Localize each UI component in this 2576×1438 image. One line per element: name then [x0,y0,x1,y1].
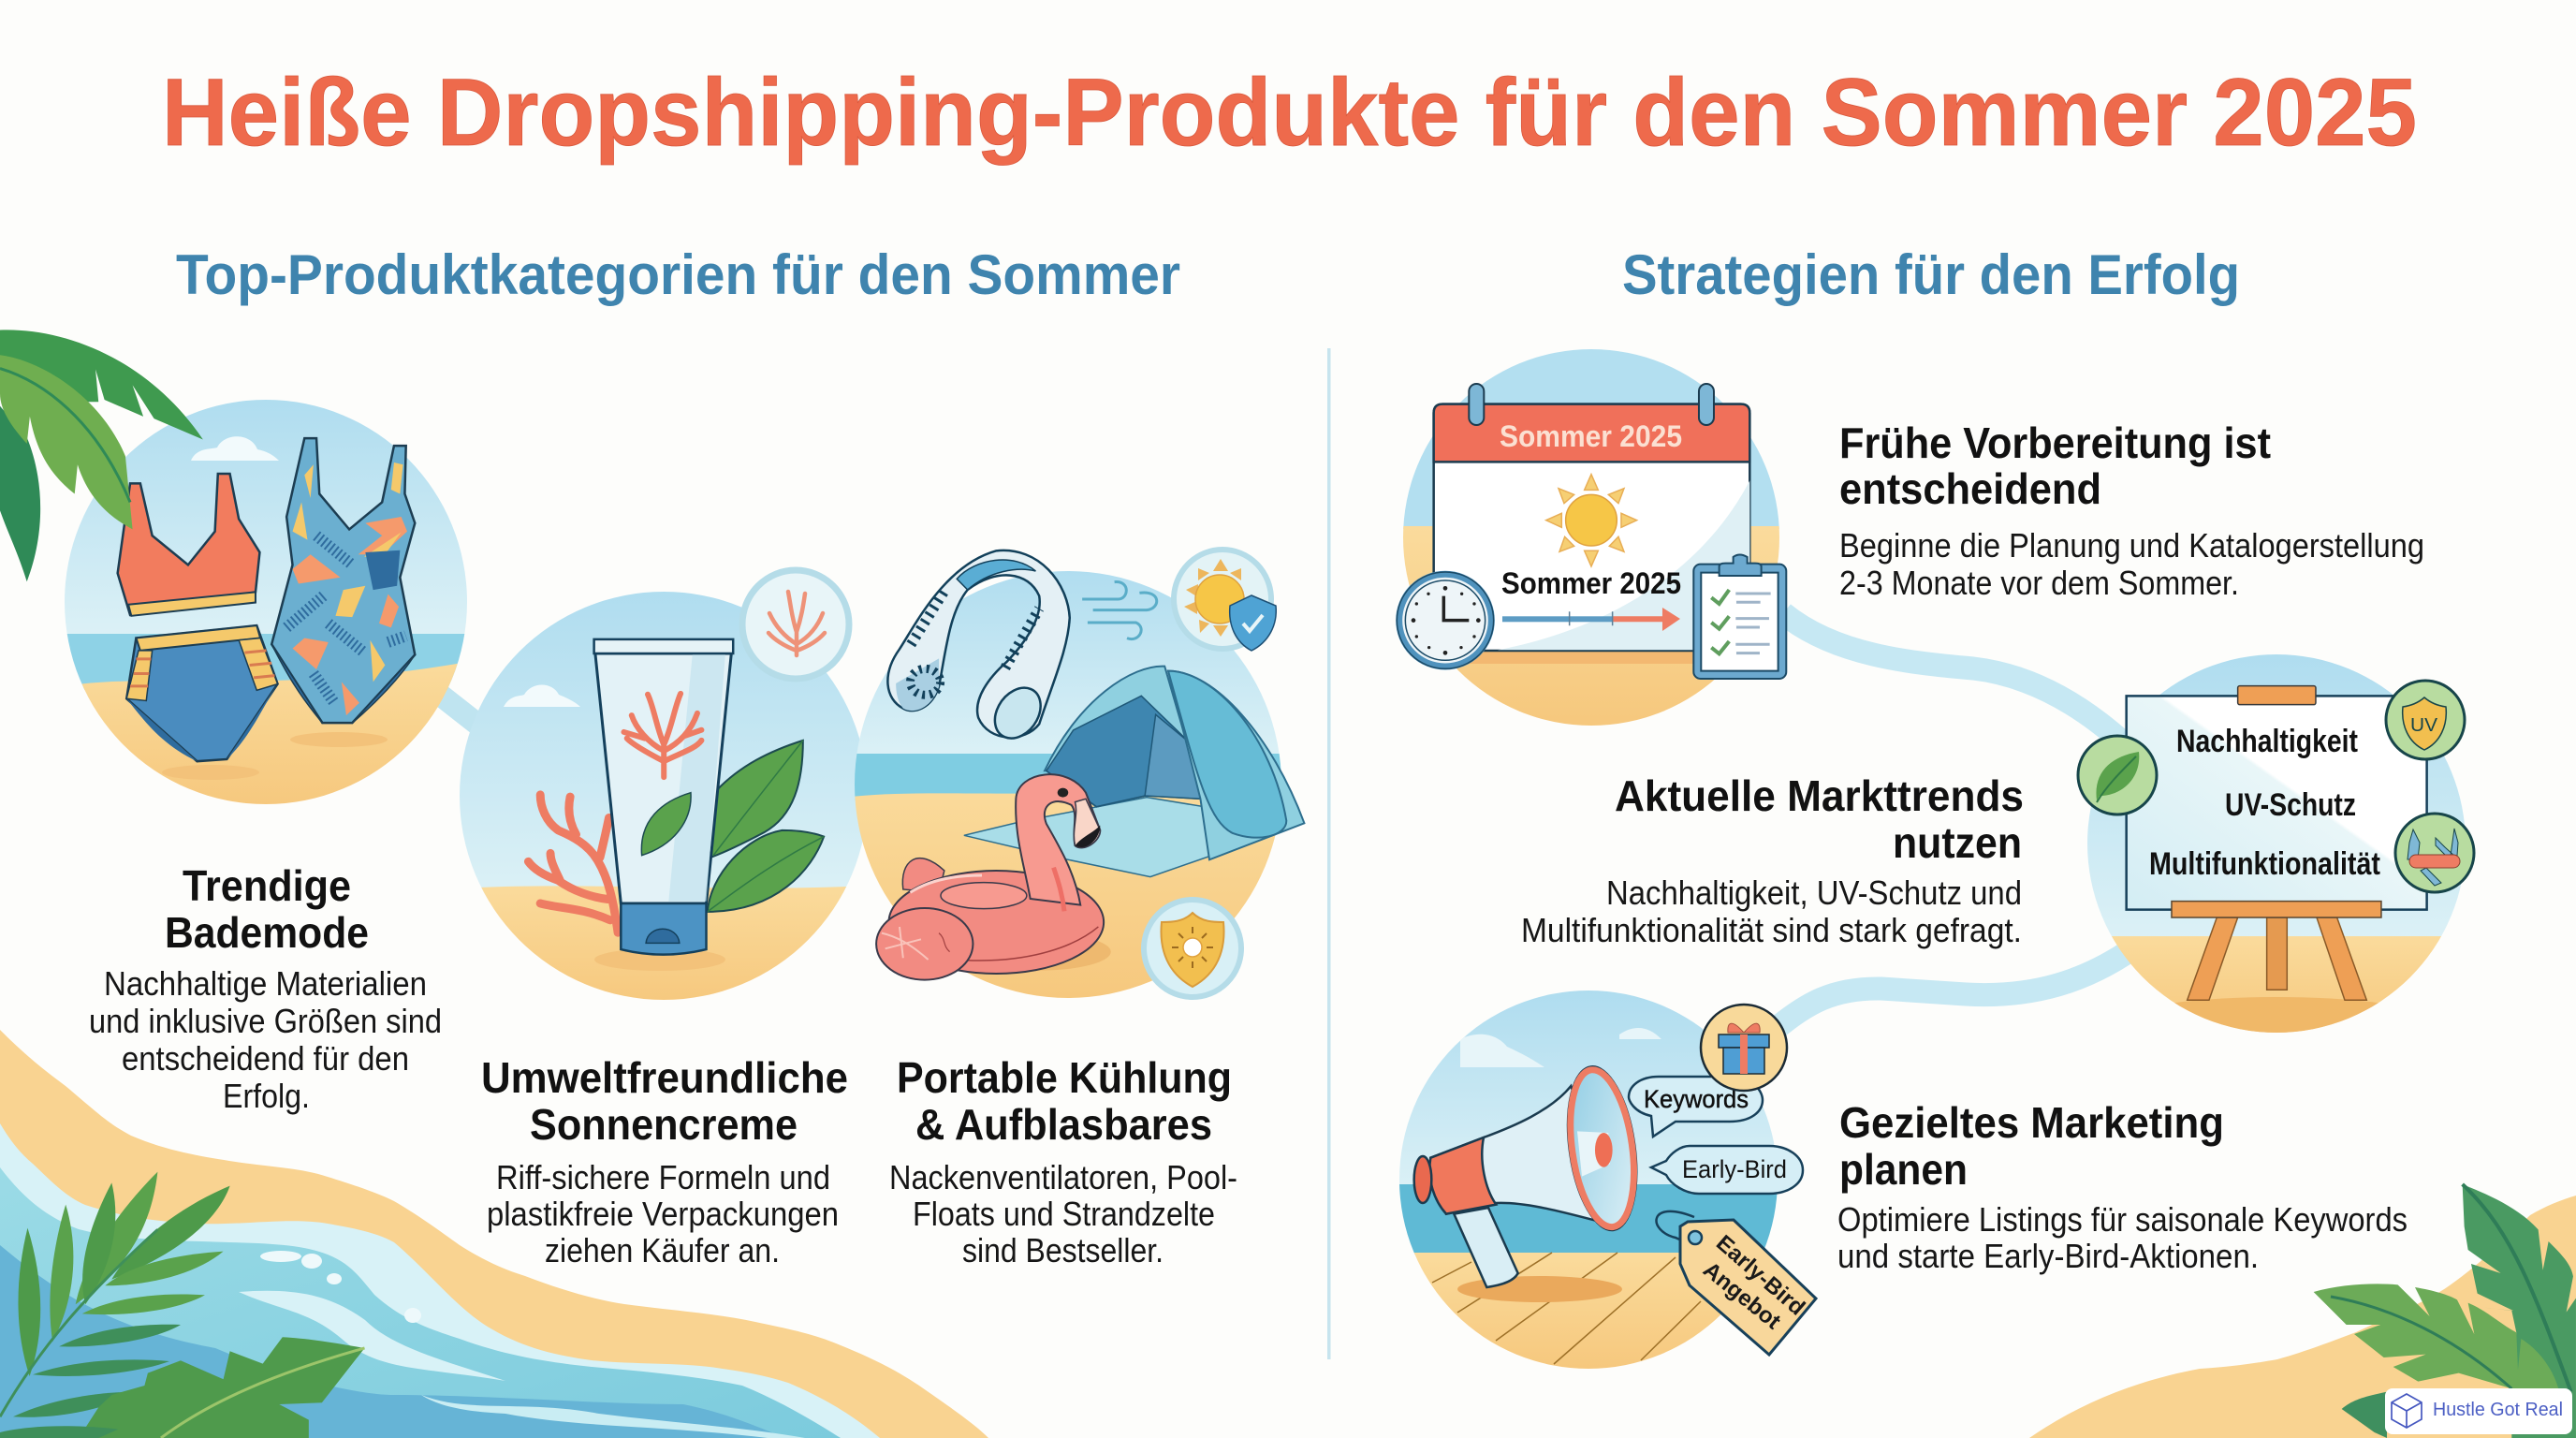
icon: reef badge [742,570,849,679]
scene: beach circle [1395,346,1788,732]
icon: UV shield badge [2386,681,2465,759]
text: Frühe Vorbereitung [1839,418,2424,602]
text: Trendige Bademode [89,861,442,1115]
palm leaves, top left [0,330,203,581]
text: Trendige Bademode: Erfolg. [223,1077,310,1115]
panel: sunscreen illustration [449,570,880,1011]
text: Portable Kühlung und Aufblasbares [889,1053,1237,1269]
text: Trendige Bademode: Trendige [183,861,351,910]
panel: swimwear illustration [56,393,477,814]
text: Gezieltes Marketing: Gezieltes Marketing [1839,1098,2224,1147]
text: Trendige Bademode: Nachhaltige Materialien [104,964,427,1003]
text: Umweltfreundliche Sonnencreme: plastikfreie Verpackungen [487,1195,839,1233]
text: Gezieltes Marketing: planen [1839,1145,1968,1194]
text: Portable Kühlung und Aufblasbares: sind Bestseller. [962,1231,1164,1269]
icon: gift badge [1701,1005,1787,1091]
palm fronds, bottom left [0,1172,364,1438]
scene: beach circle [2078,646,2471,1039]
text: Aktuelle Markttrends: Nachhaltigkeit, UV-Schutz und [1606,873,2022,912]
icon: leaf badge [2078,736,2157,814]
palm leaves, bottom right [2314,1184,2576,1438]
text: Portable Kühlung und Aufblasbares: & Aufblasbares [915,1100,1212,1149]
heading: strategies: Strategien für den Erfolg [1622,243,2240,306]
text: Portable Kühlung und Aufblasbares: Floats und Strandzelte [913,1195,1215,1233]
watermark badge [2385,1388,2572,1434]
panel: cooling and inflatables illustration [842,550,1304,1011]
icon: Early-Bird tag: Angebot [1698,1257,1785,1334]
callout: Keywords bubble: Keywords [1644,1085,1749,1113]
panel: trends board illustration [2078,646,2474,1039]
text: Aktuelle Markttrends [1521,771,2024,949]
scene: beach circle [460,592,863,1000]
icon: swimwear [118,438,415,761]
text: Aktuelle Markttrends: Aktuelle Markttrends [1615,771,2024,820]
text: Portable Kühlung und Aufblasbares: Nackenventilatoren, Pool- [889,1158,1237,1196]
center divider [1327,348,1331,1359]
callout: Early-Bird bubble [1651,1146,1803,1194]
icons: fan, wind, tent, flamingo [876,550,1304,980]
icon: easel board [2127,686,2427,1000]
connector: swimwear to sunscreen [440,695,479,726]
beach and water, bottom left [0,1030,988,1438]
icon: checklist clipboard [1693,554,1786,679]
text: Portable Kühlung und Aufblasbares: Portable Kühlung [897,1053,1232,1102]
text: Trendige Bademode: entscheidend für den [122,1039,409,1078]
icon: megaphone [1414,1062,1647,1287]
calendar label, body: Sommer 2025 [1501,566,1681,600]
text: Aktuelle Markttrends: nutzen [1893,818,2022,867]
scene: beach circle [56,393,477,814]
text: Umweltfreundliche Sonnencreme: ziehen Käufer an. [545,1231,780,1269]
icon: sun protection shield badge [1144,900,1241,997]
icon: Early-Bird tag [1657,1211,1816,1355]
scene: beach circle [842,562,1292,1011]
icon: sun with shield badge [1174,550,1276,651]
icon: Early-Bird tag: Early-Bird [1711,1230,1809,1321]
board labels: UV-Schutz [2225,787,2356,823]
board labels: Nachhaltigkeit [2176,724,2358,759]
text: Frühe Vorbereitung: entscheidend [1839,464,2101,513]
text: Gezieltes Marketing: Optimiere Listings für saisonale Keywords [1837,1200,2408,1239]
scene: beach circle [1395,988,1788,1374]
board labels: Multifunktionalität [2149,846,2380,882]
title: Heiße Dropshipping-Produkte für den Sommer 2025 [162,59,2417,166]
badge text: Hustle Got Real [2433,1400,2563,1420]
text: Trendige Bademode: und inklusive Größen sind [89,1002,442,1040]
text: Umweltfreundliche Sonnencreme: Sonnencreme [530,1100,798,1149]
callout: Keywords bubble [1629,1077,1763,1137]
board labels [2149,724,2380,882]
text: Umweltfreundliche Sonnencreme: Riff-sichere Formeln und [496,1158,830,1196]
text: Frühe Vorbereitung: Frühe Vorbereitung ist [1839,418,2271,467]
connector: trends to marketing [1769,941,2144,1034]
text: Umweltfreundliche Sonnencreme [481,1053,848,1269]
icon: sunscreen tube [528,639,824,955]
text: Aktuelle Markttrends: Multifunktionalität sind stark gefragt. [1521,911,2022,949]
beach, bottom right [2029,1196,2576,1438]
text: Frühe Vorbereitung: 2-3 Monate vor dem Sommer. [1839,564,2239,602]
callout: Early-Bird bubble: Early-Bird [1682,1155,1787,1183]
icon: calendar [1434,384,1749,651]
text: Frühe Vorbereitung: Beginne die Planung und Katalogerstellung [1839,526,2424,565]
text: Gezieltes Marketing: und starte Early-Bird-Aktionen. [1837,1237,2259,1275]
icon: cube [2392,1394,2422,1428]
connector: calendar to trends [1783,613,2125,744]
text: Umweltfreundliche Sonnencreme: Umweltfreundliche [481,1053,848,1102]
text: Trendige Bademode: Bademode [165,908,369,957]
panel: marketing illustration [1395,988,1816,1374]
icon: clock [1397,572,1494,668]
calendar label, header: Sommer 2025 [1500,419,1682,453]
heading: categories: Top-Produktkategorien für den Sommer [176,243,1180,306]
icon: UV shield badge: UV [2410,715,2438,736]
panel: calendar illustration [1395,346,1788,732]
text: Gezieltes Marketing [1837,1098,2408,1275]
icon: multitool badge [2395,814,2474,892]
